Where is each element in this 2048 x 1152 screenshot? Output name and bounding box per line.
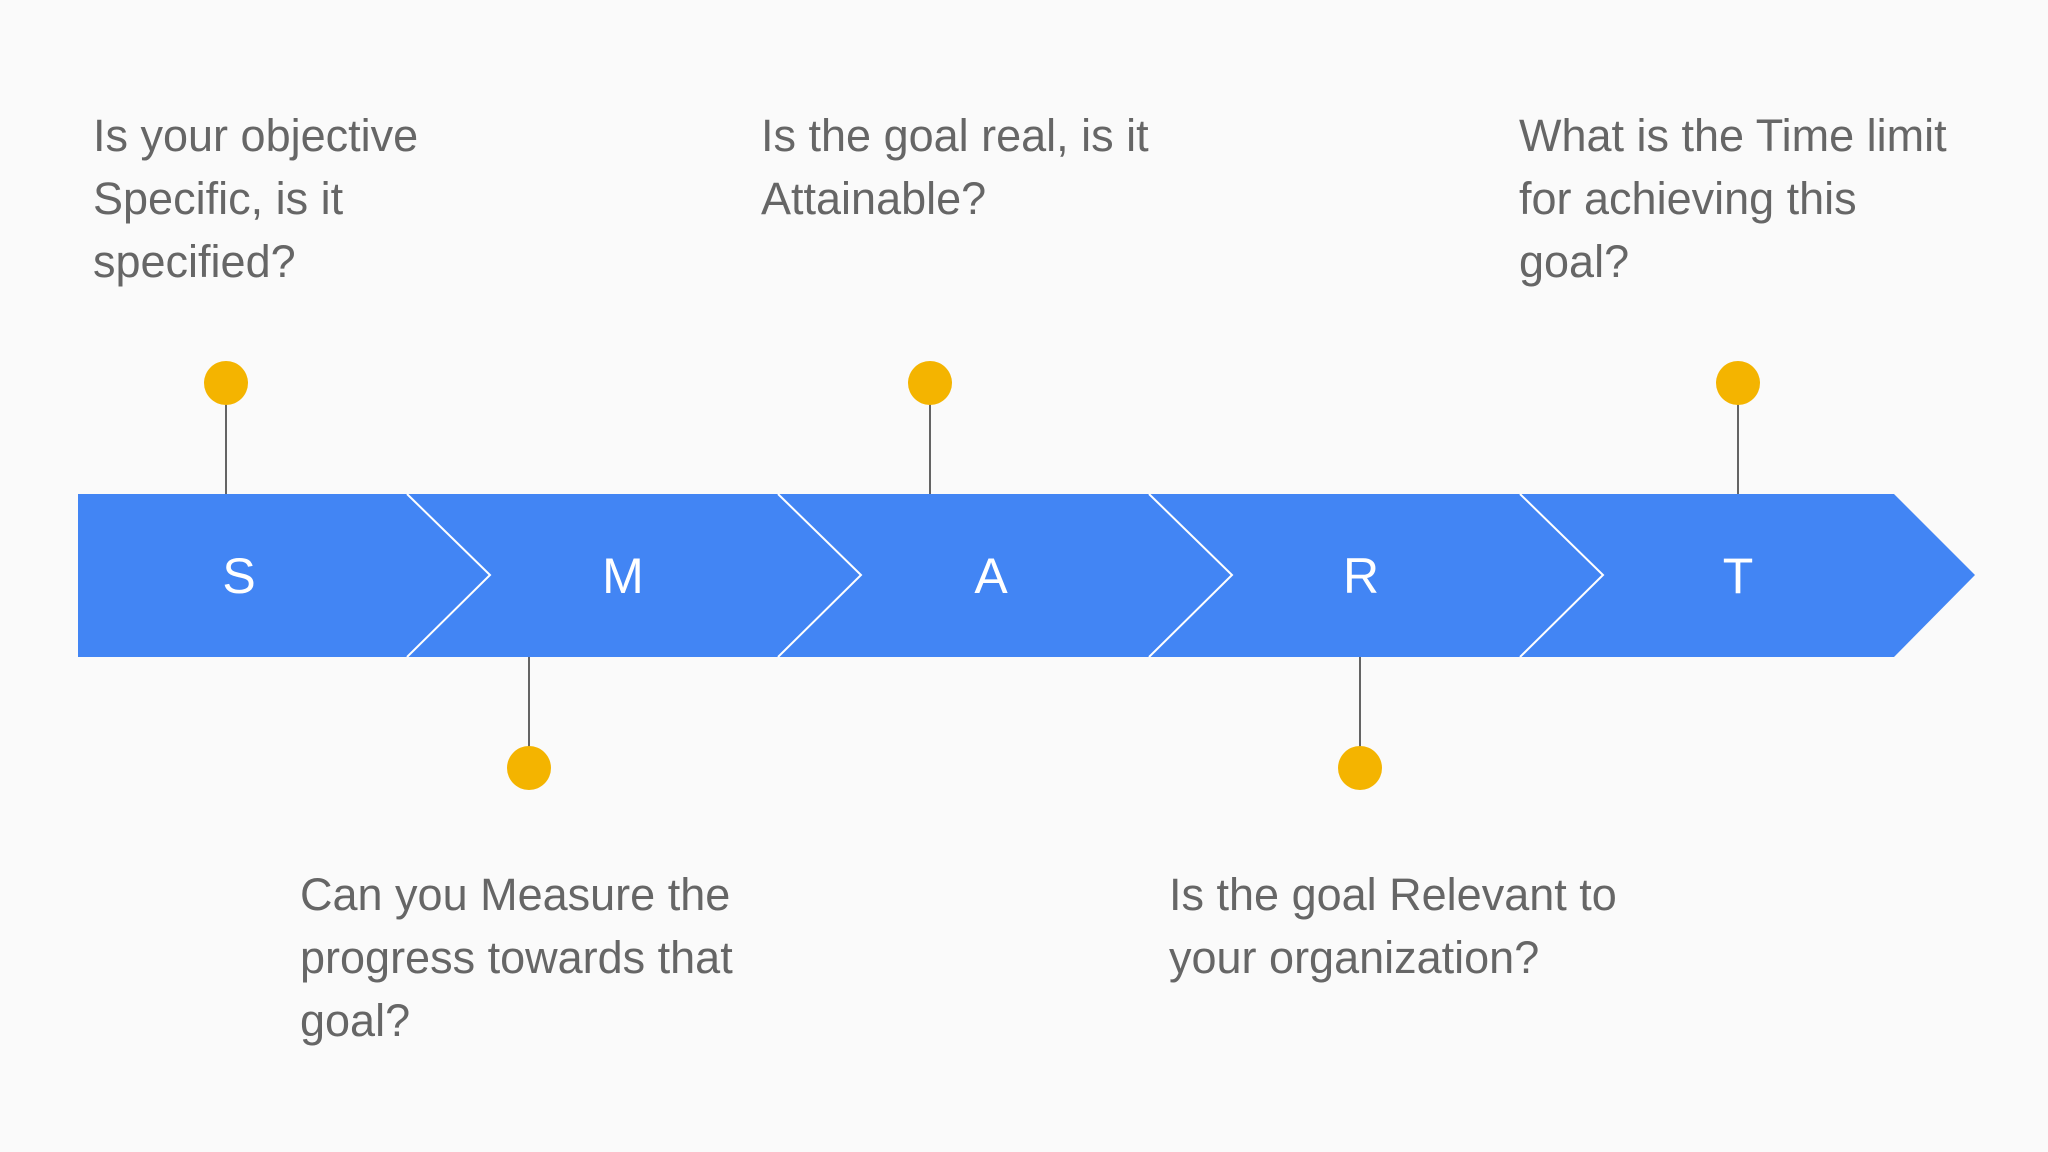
letter labels: R <box>1343 548 1379 604</box>
marker: S <box>204 361 248 494</box>
text: Time <box>1519 110 1947 287</box>
text: Measure: progress towards that <box>300 932 733 983</box>
text: Measure: goal? <box>300 995 410 1046</box>
text: Measure: Can you Measure the <box>300 869 730 920</box>
marker: M <box>507 657 551 790</box>
text: Specific: specified? <box>93 236 296 287</box>
letter labels: S <box>222 548 256 604</box>
letter labels: A <box>974 548 1008 604</box>
text: Time: for achieving this <box>1519 173 1857 224</box>
marker: R <box>1338 657 1382 790</box>
letter labels: M <box>602 548 644 604</box>
text: Specific: Is your objective <box>93 110 418 161</box>
letter labels <box>222 548 1753 604</box>
text: Attainable: Attainable? <box>761 173 986 224</box>
text: Attainable: Is the goal real, is it <box>761 110 1149 161</box>
text: Time: What is the Time limit <box>1519 110 1947 161</box>
text: Specific <box>93 110 418 287</box>
text: Specific: Specific, is it <box>93 173 344 224</box>
text: Measure <box>300 869 733 1046</box>
text: Relevant: your organization? <box>1169 932 1539 983</box>
arrow: SMART chevron bar <box>78 494 1975 657</box>
text: Relevant <box>1169 869 1617 983</box>
marker: A <box>908 361 952 494</box>
text: Relevant: Is the goal Relevant to <box>1169 869 1617 920</box>
text: Attainable <box>761 110 1149 224</box>
letter labels: T <box>1723 548 1753 604</box>
marker: T <box>1716 361 1760 494</box>
text: Time: goal? <box>1519 236 1629 287</box>
